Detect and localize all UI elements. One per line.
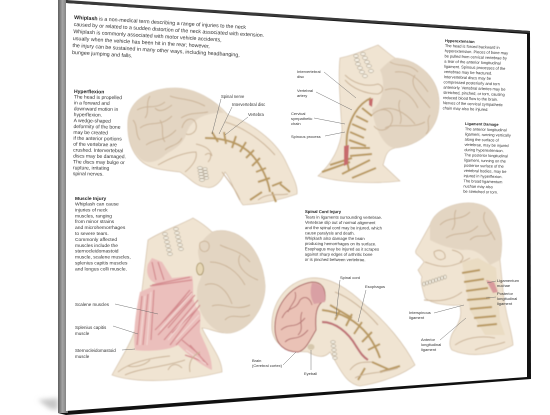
text block: hyperextension: chain may also be injured. xyxy=(443,105,489,112)
text block: hyperflexion: may be created xyxy=(73,130,108,136)
labels: muscle injury: Splenius capitis xyxy=(75,325,107,330)
text block: spinal cord injury: Spinal Cord Injury xyxy=(305,209,342,214)
labels: hyperextension: Cervical xyxy=(291,111,306,116)
text block: spinal cord injury: or is pinched between vertebrae. xyxy=(305,257,366,262)
text block: spinal cord injury: against sharp edges of arthritic bone xyxy=(305,252,373,257)
text block: hyperextension: Intervertebral discs may be xyxy=(444,74,492,81)
text block: ligament damage: vertebrae, may be injured xyxy=(464,142,509,148)
illustration: hyperflexion head xyxy=(128,88,297,205)
title text: whiplash introduction: usually when the vehicle has been hit in the rear; however, xyxy=(73,36,210,50)
text block: muscle injury: and microhemorrhages xyxy=(75,225,126,231)
text block: hyperflexion: of the vertebrae are xyxy=(73,142,117,148)
icon: teeth xyxy=(163,228,183,256)
labels: side view: longitudinal xyxy=(497,296,517,301)
text block: ligament damage: injured in hyperflexion. xyxy=(464,173,503,179)
labels: side view: ligament xyxy=(421,347,437,352)
text block: hyperflexion: Hyperflexion xyxy=(74,89,104,95)
text block: muscle injury: Whiplash can cause xyxy=(75,202,119,208)
text block: hyperextension: anteriorly. Vertebral arteries may be xyxy=(443,85,506,92)
text block: muscle injury: from minor strains xyxy=(75,219,115,225)
text block: hyperextension: be pulled from cervical vertebrae by xyxy=(444,53,507,61)
labels: hyperextension: artery xyxy=(297,93,307,98)
text block: hyperextension: reduced blood flow to the brain. xyxy=(443,95,498,102)
text block: spinal cord injury: Esophagus may be injured as it scrapes xyxy=(305,246,379,252)
text block: hyperflexion: spinal nerves. xyxy=(73,171,104,178)
labels: spinal cord: Brain xyxy=(252,358,261,363)
illustration: spinal cord head xyxy=(272,278,415,386)
labels: side view: longitudinal xyxy=(421,342,441,347)
text block: hyperflexion: deformity of the bone xyxy=(73,124,121,131)
text block: muscle injury: muscles, ranging xyxy=(75,213,112,219)
title text: whiplash introduction: caused by or related to a sudden distortion of the neck associated with extension. xyxy=(73,22,264,39)
text block: muscle injury xyxy=(75,196,131,272)
labels: muscle injury: muscle xyxy=(75,354,90,359)
labels: hyperextension: chain xyxy=(291,121,301,126)
text block: hyperflexion xyxy=(73,89,127,178)
labels: spinal cord: Eyeball xyxy=(304,371,317,376)
text block: muscle injury: muscles include the xyxy=(75,243,118,249)
labels: side view: nuchae xyxy=(497,283,511,288)
text block: ligament damage: nuchae may also xyxy=(463,183,493,189)
text block: ligament damage: ligament, running vertically xyxy=(465,131,511,138)
text block: hyperextension: Hyperextension xyxy=(445,38,475,44)
illustration: muscle injury head xyxy=(112,218,265,381)
text block: hyperextension: Nerves of the cervical sympathetic xyxy=(443,100,503,107)
illustration: side view head xyxy=(416,203,513,355)
labels: hyperextension: Intervertebral xyxy=(297,69,321,74)
icon: teeth xyxy=(354,52,374,78)
icon: teeth xyxy=(197,167,209,181)
icon: teeth xyxy=(423,275,446,286)
labels: hyperflexion: Intervertebral disc xyxy=(232,102,265,107)
labels: muscle injury: Scalene muscles xyxy=(75,302,110,307)
text block: hyperflexion: rupture, irritating xyxy=(73,165,110,172)
text block: muscle injury: to severe tears. xyxy=(75,231,109,237)
text block: ligament damage: The anterior longitudinal xyxy=(465,126,507,132)
text block: hyperextension: vertebrae may be fractured. xyxy=(444,69,492,76)
labels: hyperextension: Vertebral xyxy=(297,88,313,93)
labels: hyperflexion xyxy=(212,94,265,135)
text block: hyperflexion: crushed. Intervertebral xyxy=(73,148,123,154)
icon: teeth xyxy=(331,341,337,359)
text block: hyperextension: stretched, pinched, or torn, causing xyxy=(443,90,505,97)
text block: spinal cord injury: cause paralysis and death. xyxy=(305,230,355,236)
labels: spinal cord: Esophagus xyxy=(365,284,385,289)
labels: side view: Interspinous xyxy=(409,310,431,315)
text block: ligament damage: along the surface of xyxy=(465,137,500,143)
text block: spinal cord injury: and the spinal cord may be injured, which xyxy=(305,225,383,231)
labels: hyperextension: sympathetic xyxy=(291,116,312,121)
text block: spinal cord injury: Whiplash also damage the brain xyxy=(305,236,365,241)
text block: hyperflexion: A wedge-shaped xyxy=(74,118,111,125)
text block: muscle injury: sternocleidomastoid xyxy=(75,249,119,255)
labels: side view: ligament xyxy=(409,315,425,320)
title text: whiplash introduction: Whiplash is a non-medical term describing a range of injuries to the neck xyxy=(74,15,247,31)
text block: hyperflexion: The discs may bulge or xyxy=(73,159,125,166)
labels: muscle injury: muscle xyxy=(75,331,90,336)
text block: hyperextension xyxy=(443,38,509,113)
text block: ligament damage: Ligament Damage xyxy=(465,121,499,127)
title text: whiplash introduction: bungee jumping and falls. xyxy=(72,50,132,59)
text block: hyperflexion: discs may be damaged. xyxy=(73,153,126,160)
text block: spinal cord injury xyxy=(305,209,383,262)
labels: side view: Ligamentum xyxy=(497,278,520,283)
labels: spinal cord xyxy=(252,275,385,376)
text block: spinal cord injury: Tears in ligaments surrounding vertebrae. xyxy=(305,214,382,220)
text block: ligament damage: ligament, running on the xyxy=(464,157,506,164)
text block: spinal cord injury: Vertebrae slip out of normal alignment xyxy=(305,220,376,225)
labels: hyperflexion: Spinal nerve xyxy=(221,94,245,99)
text block: hyperextension: The head is forced backward in xyxy=(445,43,500,50)
text block: spinal cord injury: producing hemorrhages on its surface. xyxy=(305,241,376,246)
text block: ligament damage: The broad ligamentum xyxy=(463,178,503,184)
text block: hyperextension: a tear of the anterior longitudinal xyxy=(444,59,501,66)
labels: hyperextension: disc xyxy=(297,74,304,79)
labels: side view: ligament xyxy=(497,301,513,306)
text block: hyperflexion: in a forward and xyxy=(74,100,110,107)
text block: hyperflexion: downward motion in xyxy=(74,106,118,113)
text block: hyperflexion: The head is propelled xyxy=(74,94,122,101)
text block: muscle injury: Muscle Injury xyxy=(75,196,107,202)
labels: muscle injury: Sternocleidomastoid xyxy=(75,348,116,353)
text block: ligament damage: be stretched or torn. xyxy=(463,189,498,195)
text block: muscle injury: splenius capitis muscles xyxy=(75,260,128,266)
text block: hyperextension: hyperextension. Pieces of bone may xyxy=(445,48,508,55)
labels: hyperextension: Spinous process xyxy=(291,134,321,139)
labels: side view: Posterior xyxy=(497,291,514,296)
text block: hyperflexion: if the anterior portions xyxy=(73,136,122,142)
labels: side view xyxy=(409,278,520,352)
title text: whiplash introduction xyxy=(72,15,265,67)
labels: spinal cord: (Cerebral cortex) xyxy=(252,363,283,368)
text block: hyperextension: ligament. Spinous processes of the xyxy=(444,64,506,71)
text block: muscle injury: and longus colli muscle. xyxy=(75,266,127,272)
text block: hyperextension: compressed posteriorly and torn xyxy=(444,79,500,86)
text block: muscle injury: Commonly affected xyxy=(75,237,117,243)
labels: hyperflexion: Vertebra xyxy=(248,112,265,117)
text block: muscle injury: injuries of neck xyxy=(75,207,108,213)
illustration: hyperextension head xyxy=(318,45,439,183)
text block: ligament damage: posterior surface of the xyxy=(464,163,504,169)
title text: whiplash introduction: the injury can be sustained in many other ways, including headbanging, xyxy=(72,43,240,59)
labels: side view: Anterior xyxy=(421,337,436,342)
labels: hyperextension xyxy=(291,69,356,139)
text block: ligament damage xyxy=(463,121,511,195)
title text: whiplash introduction: Whiplash is commonly associated with motor vehicle accidents, xyxy=(73,29,222,44)
text block: hyperflexion: hyperflexion. xyxy=(74,112,102,119)
labels: spinal cord: Spinal cord xyxy=(340,275,360,280)
text block: ligament damage: The posterior longitudinal xyxy=(464,152,508,158)
text block: ligament damage: during hyperextension. xyxy=(464,147,504,153)
text block: muscle injury: muscle, scalene muscles, xyxy=(75,255,131,261)
text block: ligament damage: vertebral bodies, may be xyxy=(464,168,506,174)
labels: muscle injury xyxy=(75,302,158,359)
